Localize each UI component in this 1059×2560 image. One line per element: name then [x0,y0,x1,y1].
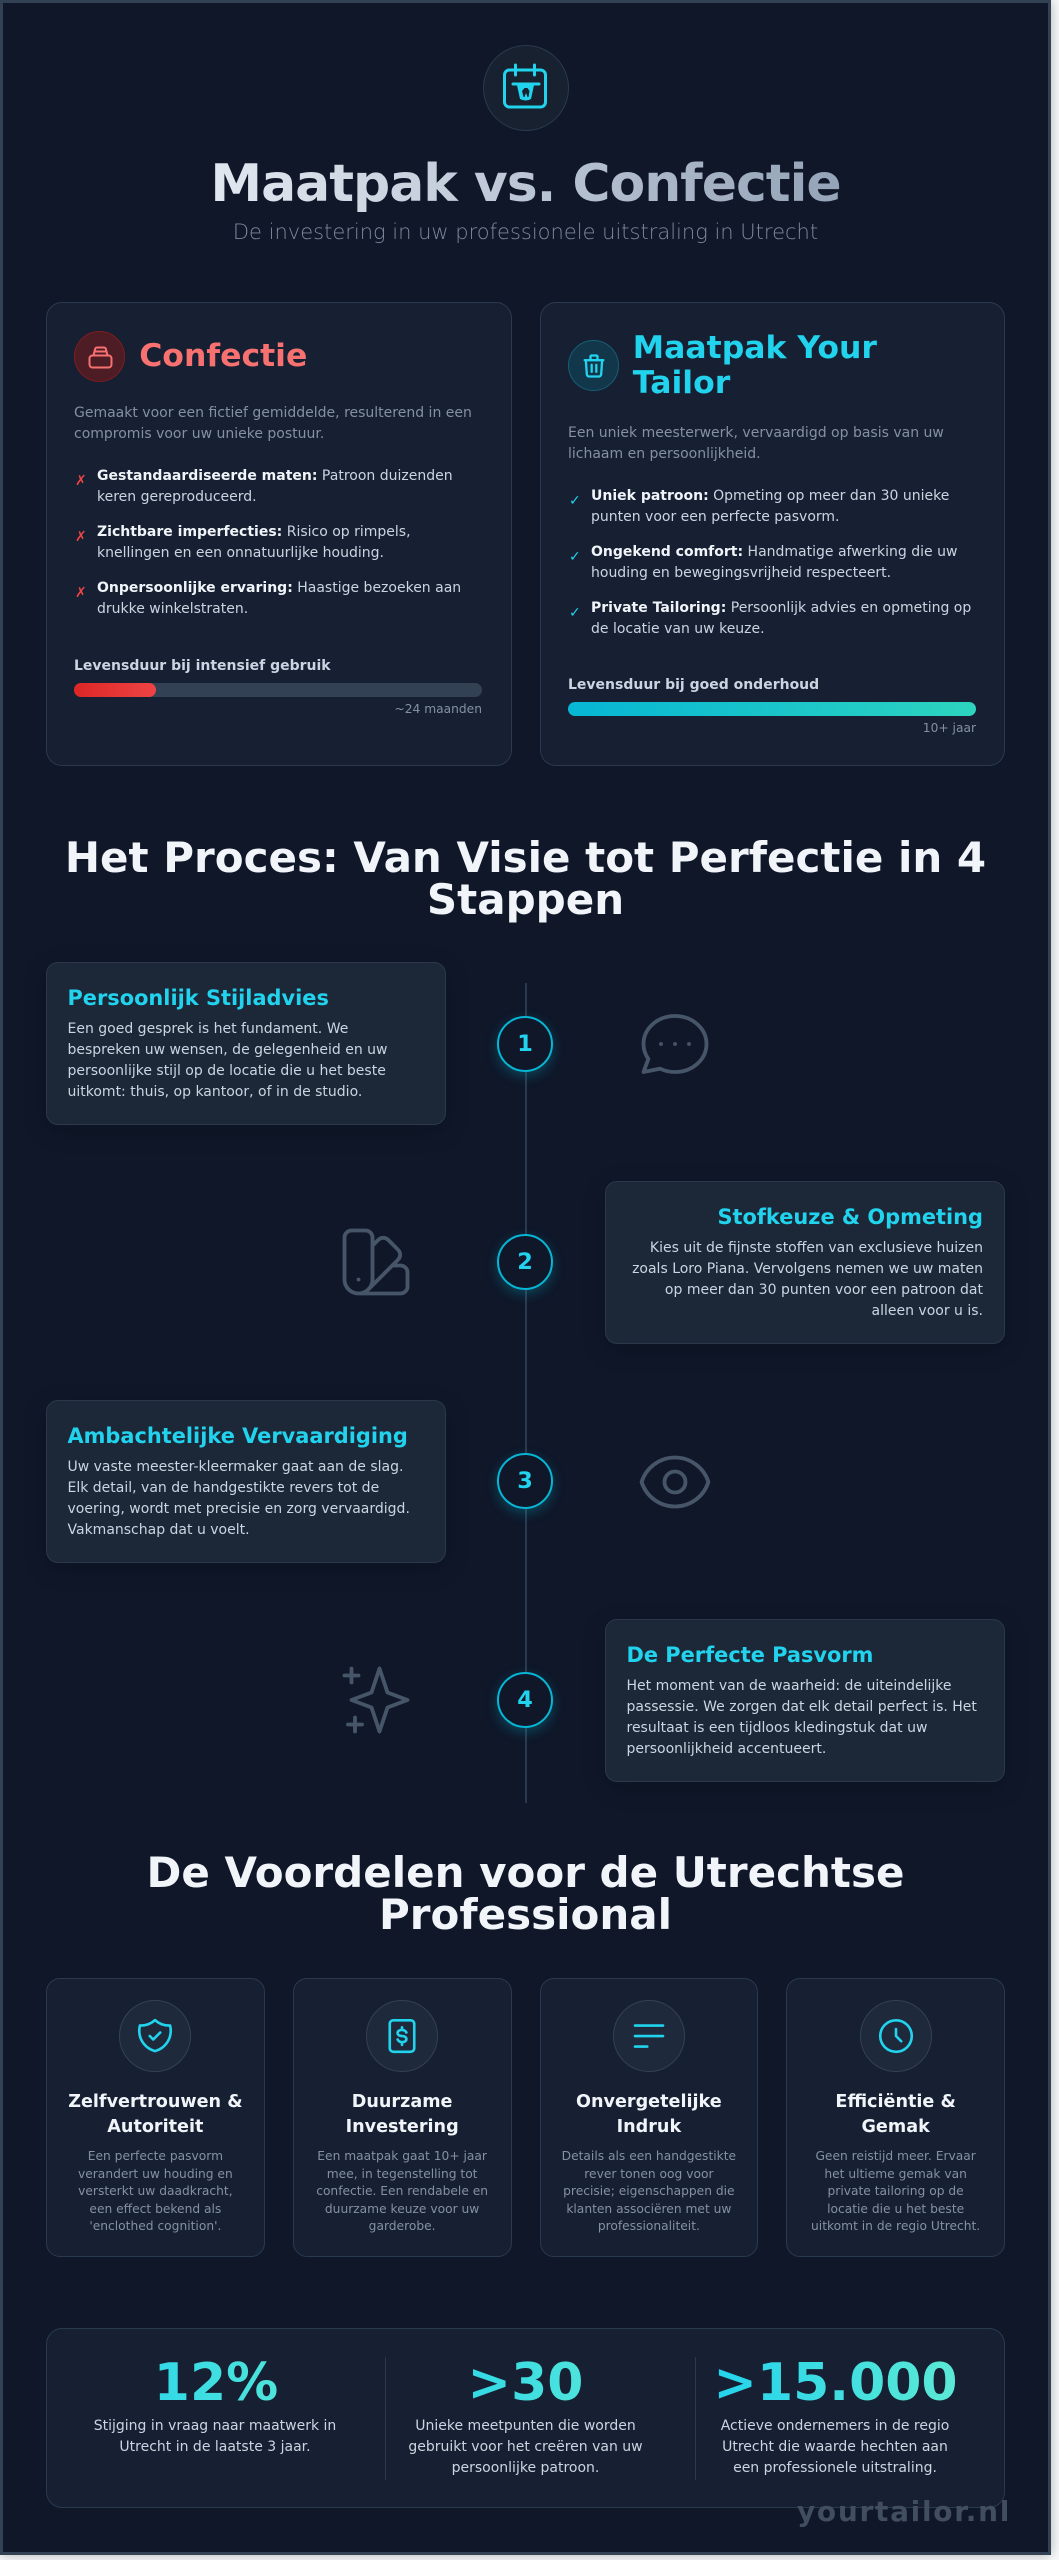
text: confectie intro [74,405,472,442]
benefit 3 text: rever tonen oog voor [584,2166,713,2180]
stat 1 text [94,2418,336,2455]
benefit 3 title: Onvergetelijke [576,2092,722,2112]
benefit 3 text [562,2149,736,2233]
heading: voordelen [147,1848,904,1938]
stat 2 number: >30 [468,2353,583,2413]
stat 1 number: 12% [154,2353,278,2413]
benefit 4 title: Efficiëntie & [835,2092,956,2112]
stat 2 text: gebruikt voor het creëren van uw [408,2439,643,2455]
step 3 number [497,1453,553,1509]
stat 2 number [396,2353,656,2413]
panel: maatpak [540,302,1005,766]
item 3: drukke winkelstraten. [97,601,248,617]
step 3 text: Uw vaste meester-kleermaker gaat aan de slag. [68,1459,403,1475]
benefit 4 text: private tailoring op de [828,2184,964,2198]
step 4 number [497,1672,553,1728]
stat 2 text: Unieke meetpunten die worden [415,2418,636,2434]
item 2: knellingen en een onnatuurlijke houding. [97,545,384,561]
item 1: Uniek patroon: Opmeting op meer dan 30 unieke [591,488,949,504]
icon: shield [138,2018,172,2052]
benefit 2 title: Duurzame [352,2092,452,2112]
step 1 title: Persoonlijk Stijladvies [68,986,329,1010]
item 2: Zichtbare imperfecties: Risico op rimpels, [97,524,411,540]
benefit 2 text: Een maatpak gaat 10+ jaar [317,2149,487,2163]
benefit 4 text: het ultieme gemak van [824,2166,967,2180]
heading: het proces: Het Proces: Van Visie tot Perfectie in 4 [65,832,986,882]
stat 3 text [720,2418,949,2476]
panel: benefit 1 [46,1978,265,2257]
step 3 text [68,1459,410,1538]
item 3 [97,580,461,617]
item 2: houding en bewegingsvrijheid respecteert. [591,565,891,581]
item 3 [591,600,971,637]
benefit 1 title: Zelfvertrouwen & [68,2092,243,2112]
step 2 title: Stofkeuze & Opmeting [717,1205,983,1229]
value: 10+ jaar: 10+ jaar [923,721,976,735]
benefit 3 title [576,2092,722,2136]
icon: dollar document [388,2019,416,2054]
benefit 3 text: precisie; eigenschappen die [563,2184,735,2198]
benefit 1 text: versterkt uw daadkracht, [78,2184,233,2198]
step 4 text: persoonlijkheid accentueert. [626,1741,826,1757]
item 3: Private Tailoring: Persoonlijk advies en opmeting op [591,600,971,616]
icon: eye [640,1456,710,1508]
icon: sparkles [342,1666,410,1734]
benefit 1 text: 'enclothed cognition'. [89,2219,221,2233]
benefit 4 title [835,2092,956,2136]
stat 1 text: Utrecht in de laatste 3 jaar. [119,2439,311,2455]
step 4 card [605,1619,1005,1782]
stat 2 text [408,2418,643,2476]
heading: confectie: Confectie [139,338,307,374]
step 3 title: Ambachtelijke Vervaardiging [68,1424,408,1448]
mark 1: ✗ [75,473,87,489]
step 3 card [46,1400,446,1563]
item 1: keren gereproduceerd. [97,489,257,505]
benefit 2 text [316,2149,488,2233]
divider 1 [385,2357,386,2480]
step 3 text: Vakmanschap dat u voelt. [68,1522,250,1538]
benefit 1 text: een effect bekend als [89,2202,221,2216]
step 2 text: zoals Loro Piana. Vervolgens nemen we uw maten [632,1261,983,1277]
step 1 number: 1 [517,1031,533,1057]
text: maatpak intro: lichaam en persoonlijkheid. [568,446,761,462]
step 2 number: 2 [517,1249,533,1275]
step 1 text [68,1021,387,1100]
panel: benefit 4 [786,1978,1005,2257]
list: maatpak voordelen [569,488,971,637]
panel: benefit 3 [540,1978,758,2257]
icon circle: benefit 1 [119,2000,191,2072]
step 3 number: 3 [517,1468,533,1494]
icon: swatch [342,1228,410,1296]
icon circle: benefit 2 [366,2000,438,2072]
panel: confectie [46,302,512,766]
benefit 3 text: Details als een handgestikte [562,2149,736,2163]
step 3 text: Elk detail, van de handgestikte revers tot de [68,1480,379,1496]
step 2 text: Kies uit de fijnste stoffen van exclusieve huizen [650,1240,983,1256]
heading: voordelen: De Voordelen voor de Utrechtse [147,1848,904,1896]
step 2 text [632,1240,983,1319]
item 2 [97,524,411,561]
mark 2: ✓ [569,549,581,565]
step 4 title: De Perfecte Pasvorm [626,1643,873,1667]
benefit 1 title [68,2092,243,2136]
mark 3: ✗ [75,585,87,601]
icon circle: benefit 4 [860,2000,932,2072]
step 3 text: voering, wordt met precisie en zorg vervaardigd. [68,1501,410,1517]
benefit 1 text: verandert uw houding en [78,2166,233,2180]
benefit 3 text: klanten associëren met uw [566,2202,731,2216]
divider 2 [694,2357,696,2480]
stat 1 text: Stijging in vraag naar maatwerk in [94,2418,336,2434]
icon: lines [634,2024,664,2048]
benefit 4 text: uitkomt in de regio Utrecht. [811,2219,980,2233]
icon: clock [878,2019,914,2054]
step 4 text: Het moment van de waarheid: de uiteindelijke [626,1678,952,1694]
step 1 text: uitkomt: thuis, op kantoor, of in de studio. [68,1084,362,1100]
step 2 number [497,1234,553,1290]
benefit 1 text: Een perfecte pasvorm [88,2149,223,2163]
header icon: calendar badge [482,45,568,131]
text: maatpak intro [568,425,944,462]
benefit 4 text [811,2149,980,2233]
benefit 2 title [346,2092,459,2136]
benefit 2 text: garderobe. [369,2219,436,2233]
stat 1 number [86,2353,346,2413]
benefit 4 title: Gemak [861,2116,930,2136]
panel: statistieken [46,2328,1005,2508]
benefit 2 text: duurzame keuze voor uw [325,2202,479,2216]
label: levensduur confectie: Levensduur bij intensief gebruik [74,658,331,674]
item 1: punten voor een perfecte pasvorm. [591,509,840,525]
step 2 text: op meer dan 30 punten voor een patroon dat [665,1282,983,1298]
step 1 card [46,962,446,1125]
bar: levensduur maatpak [568,702,976,716]
stat 3 text: Actieve ondernemers in de regio [721,2418,949,2434]
subtitle: De investering in uw professionele uitstraling in Utrecht [233,220,818,244]
heading: maatpak: Tailor [633,364,730,400]
heading: het proces [65,832,986,924]
item 2: Ongekend comfort: Handmatige afwerking die uw [591,544,957,560]
text: confectie intro: Gemaakt voor een fictief gemiddelde, resulterend in een [74,405,472,421]
item 1 [591,488,949,525]
item 2 [591,544,957,581]
step 4 number: 4 [517,1687,533,1713]
benefit 3 text: professionaliteit. [598,2219,700,2233]
step 1 text: Een goed gesprek is het fundament. We [68,1021,348,1037]
mark 3: ✓ [569,605,581,621]
text: maatpak intro: Een uniek meesterwerk, vervaardigd op basis van uw [568,425,944,441]
benefit 4 text: Geen reistijd meer. Ervaar [815,2149,976,2163]
stat 3 number: >15.000 [713,2353,958,2413]
benefit 1 title: Autoriteit [107,2116,203,2136]
icon: confectie [74,331,125,382]
icon: maatpak [568,340,619,391]
mark 1: ✓ [569,493,581,509]
benefit 4 text: locatie die u het beste [827,2202,964,2216]
mark 2: ✗ [75,529,87,545]
item 1: Gestandaardiseerde maten: Patroon duizenden [97,468,453,484]
benefit 1 text [78,2149,233,2233]
step 4 text: resultaat is een tijdloos kledingstuk dat uw [626,1720,927,1736]
benefit 3 title: Indruk [617,2116,681,2136]
panel: benefit 2 [293,1978,512,2257]
value: 24 maanden: ~24 maanden [394,702,482,716]
item 3: Onpersoonlijke ervaring: Haastige bezoeken aan [97,580,461,596]
icon: chat [642,1014,708,1074]
text: confectie intro: compromis voor uw unieke postuur. [74,426,324,442]
title: Maatpak vs. Confectie [210,154,841,214]
item 1 [97,468,453,505]
heading: maatpak: Maatpak Your [633,330,877,366]
stat 2 text: persoonlijke patroon. [452,2460,599,2476]
label: levensduur maatpak: Levensduur bij goed onderhoud [568,677,819,693]
item 3: de locatie van uw keuze. [591,621,765,637]
bar: levensduur confectie [74,683,482,697]
icon circle: benefit 3 [613,2000,685,2072]
step 1 number [497,1016,553,1072]
step 1 text: persoonlijke stijl op de locatie die u het beste [68,1063,386,1079]
benefit 2 text: mee, in tegenstelling tot [327,2166,478,2180]
benefit 2 text: confectie. Een rendabele en [316,2184,488,2198]
heading: het proces: Stappen [427,874,624,924]
step 2 card [605,1181,1005,1344]
bar fill 20% [74,683,156,697]
step 2 text: alleen voor u is. [872,1303,983,1319]
step 1 text: bespreken uw wensen, de gelegenheid en uw [68,1042,387,1058]
step 4 text: passessie. We zorgen dat elk detail perfect is. Het [626,1699,977,1715]
list: confectie nadelen [75,468,461,617]
heading: voordelen: Professional [379,1890,672,1938]
stat 3 text: een professionele uitstraling. [733,2460,937,2476]
stat 3 text: Utrecht die waarde hechten aan [722,2439,948,2455]
timeline line [524,983,526,1803]
step 4 text [626,1678,977,1757]
watermark: yourtailor.nl [797,2495,1011,2528]
benefit 2 title: Investering [346,2116,459,2136]
heading: maatpak [632,330,877,400]
